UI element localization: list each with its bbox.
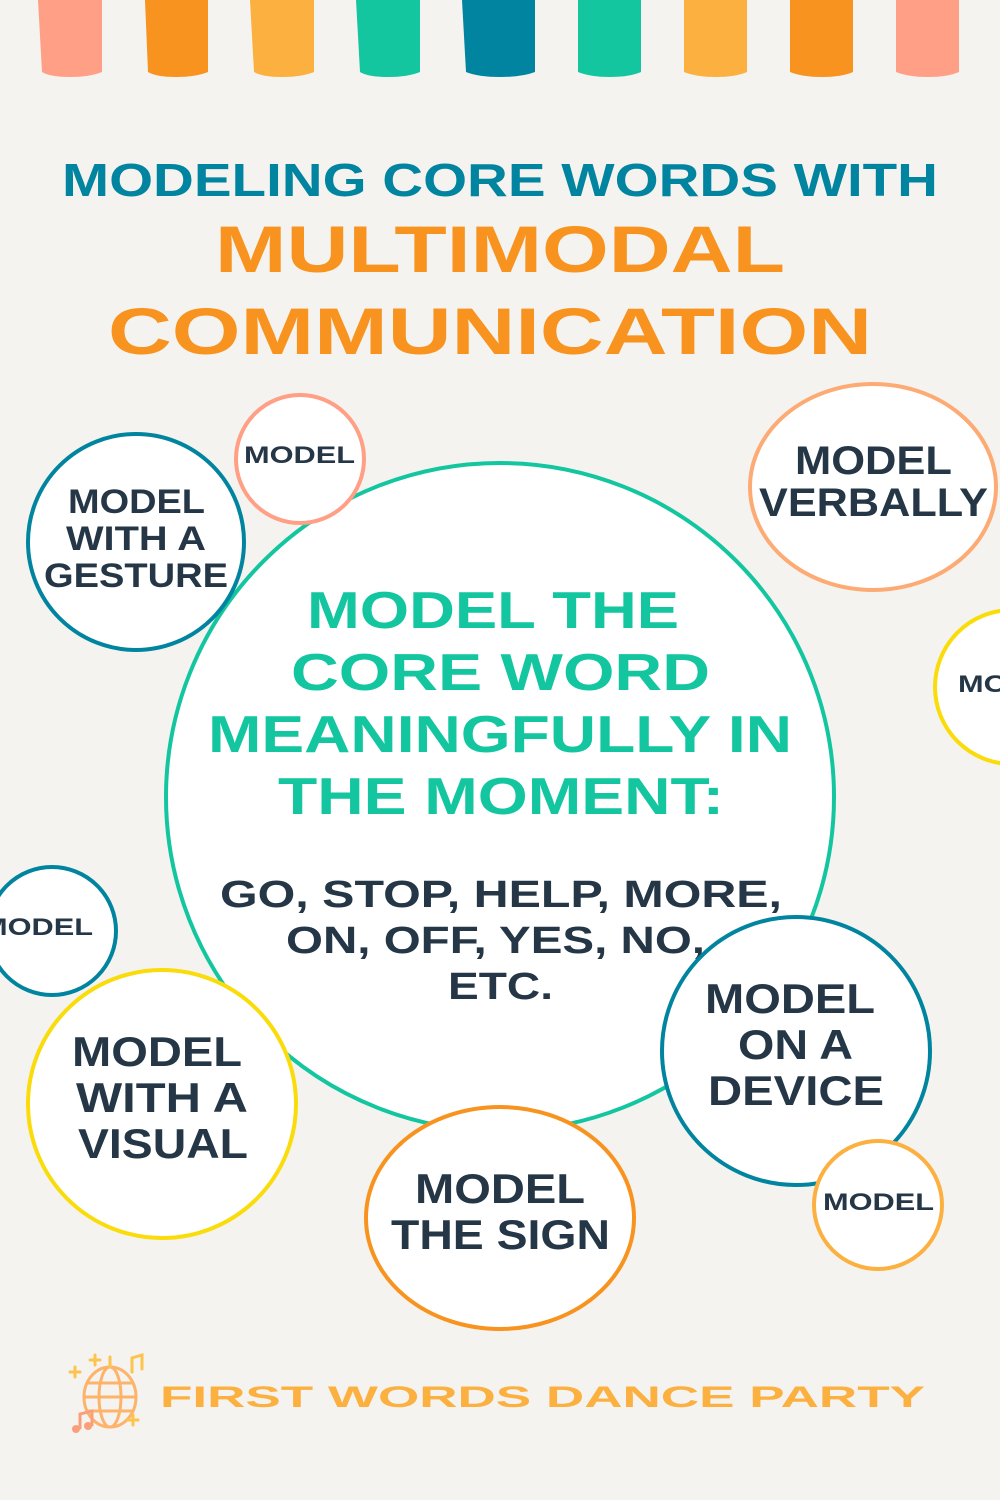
bubble: model with a gesture (28, 434, 244, 650)
panel: main circle: ON, OFF, YES, NO, (286, 920, 705, 962)
panel: main circle (166, 463, 834, 1131)
decorative bars top (38, 0, 959, 77)
bubble: model with a gesture: GESTURE (44, 557, 228, 595)
bubble: right edge (935, 610, 1000, 764)
bubble: model with a gesture: MODEL (68, 483, 205, 521)
bubble: model with a gesture: WITH A (66, 520, 206, 558)
title: MODELING CORE WORDS WITH (62, 154, 938, 206)
bubble: model the sign: MODEL (415, 1165, 585, 1212)
title: COMMUNICATION (108, 294, 872, 368)
icon: disco globe logo (70, 1355, 142, 1433)
bubble: model with a visual (28, 970, 296, 1238)
bubble: model on a device: MODEL (705, 975, 875, 1022)
bubble: model verbally: MODEL (795, 439, 952, 483)
bubble: model verbally (750, 384, 996, 590)
panel: main circle: ETC. (448, 966, 553, 1008)
panel: main circle: GO, STOP, HELP, MORE, (220, 874, 782, 916)
bubble: model on a device (662, 917, 930, 1185)
panel: main circle: CORE WORD (291, 644, 710, 702)
bubble: left edge (0, 867, 116, 995)
bubble: small model bottom right (814, 1141, 942, 1269)
bubble: model verbally: VERBALLY (759, 481, 988, 525)
bubble: model on a device: DEVICE (708, 1067, 884, 1114)
panel: main circle: THE MOMENT: (278, 768, 724, 826)
bubble: model with a visual: MODEL (72, 1028, 242, 1075)
panel: main circle: MEANINGFULLY IN (208, 706, 792, 764)
title (62, 154, 938, 368)
title: MULTIMODAL (215, 212, 785, 286)
bubble: model the sign (366, 1107, 634, 1329)
logo text: FIRST WORDS DANCE PARTY (160, 1381, 925, 1414)
bubble: small model bottom right: MODEL (823, 1189, 934, 1216)
bubble: model on a device: ON A (738, 1021, 853, 1068)
bubble: small model top (236, 395, 364, 523)
bubble: model with a visual: VISUAL (78, 1120, 248, 1167)
bubble: model with a visual: WITH A (76, 1074, 248, 1121)
bubble: small model top: MODEL (244, 442, 355, 469)
panel: main circle: MODEL THE (307, 582, 679, 640)
bubble: model the sign: THE SIGN (391, 1211, 610, 1258)
